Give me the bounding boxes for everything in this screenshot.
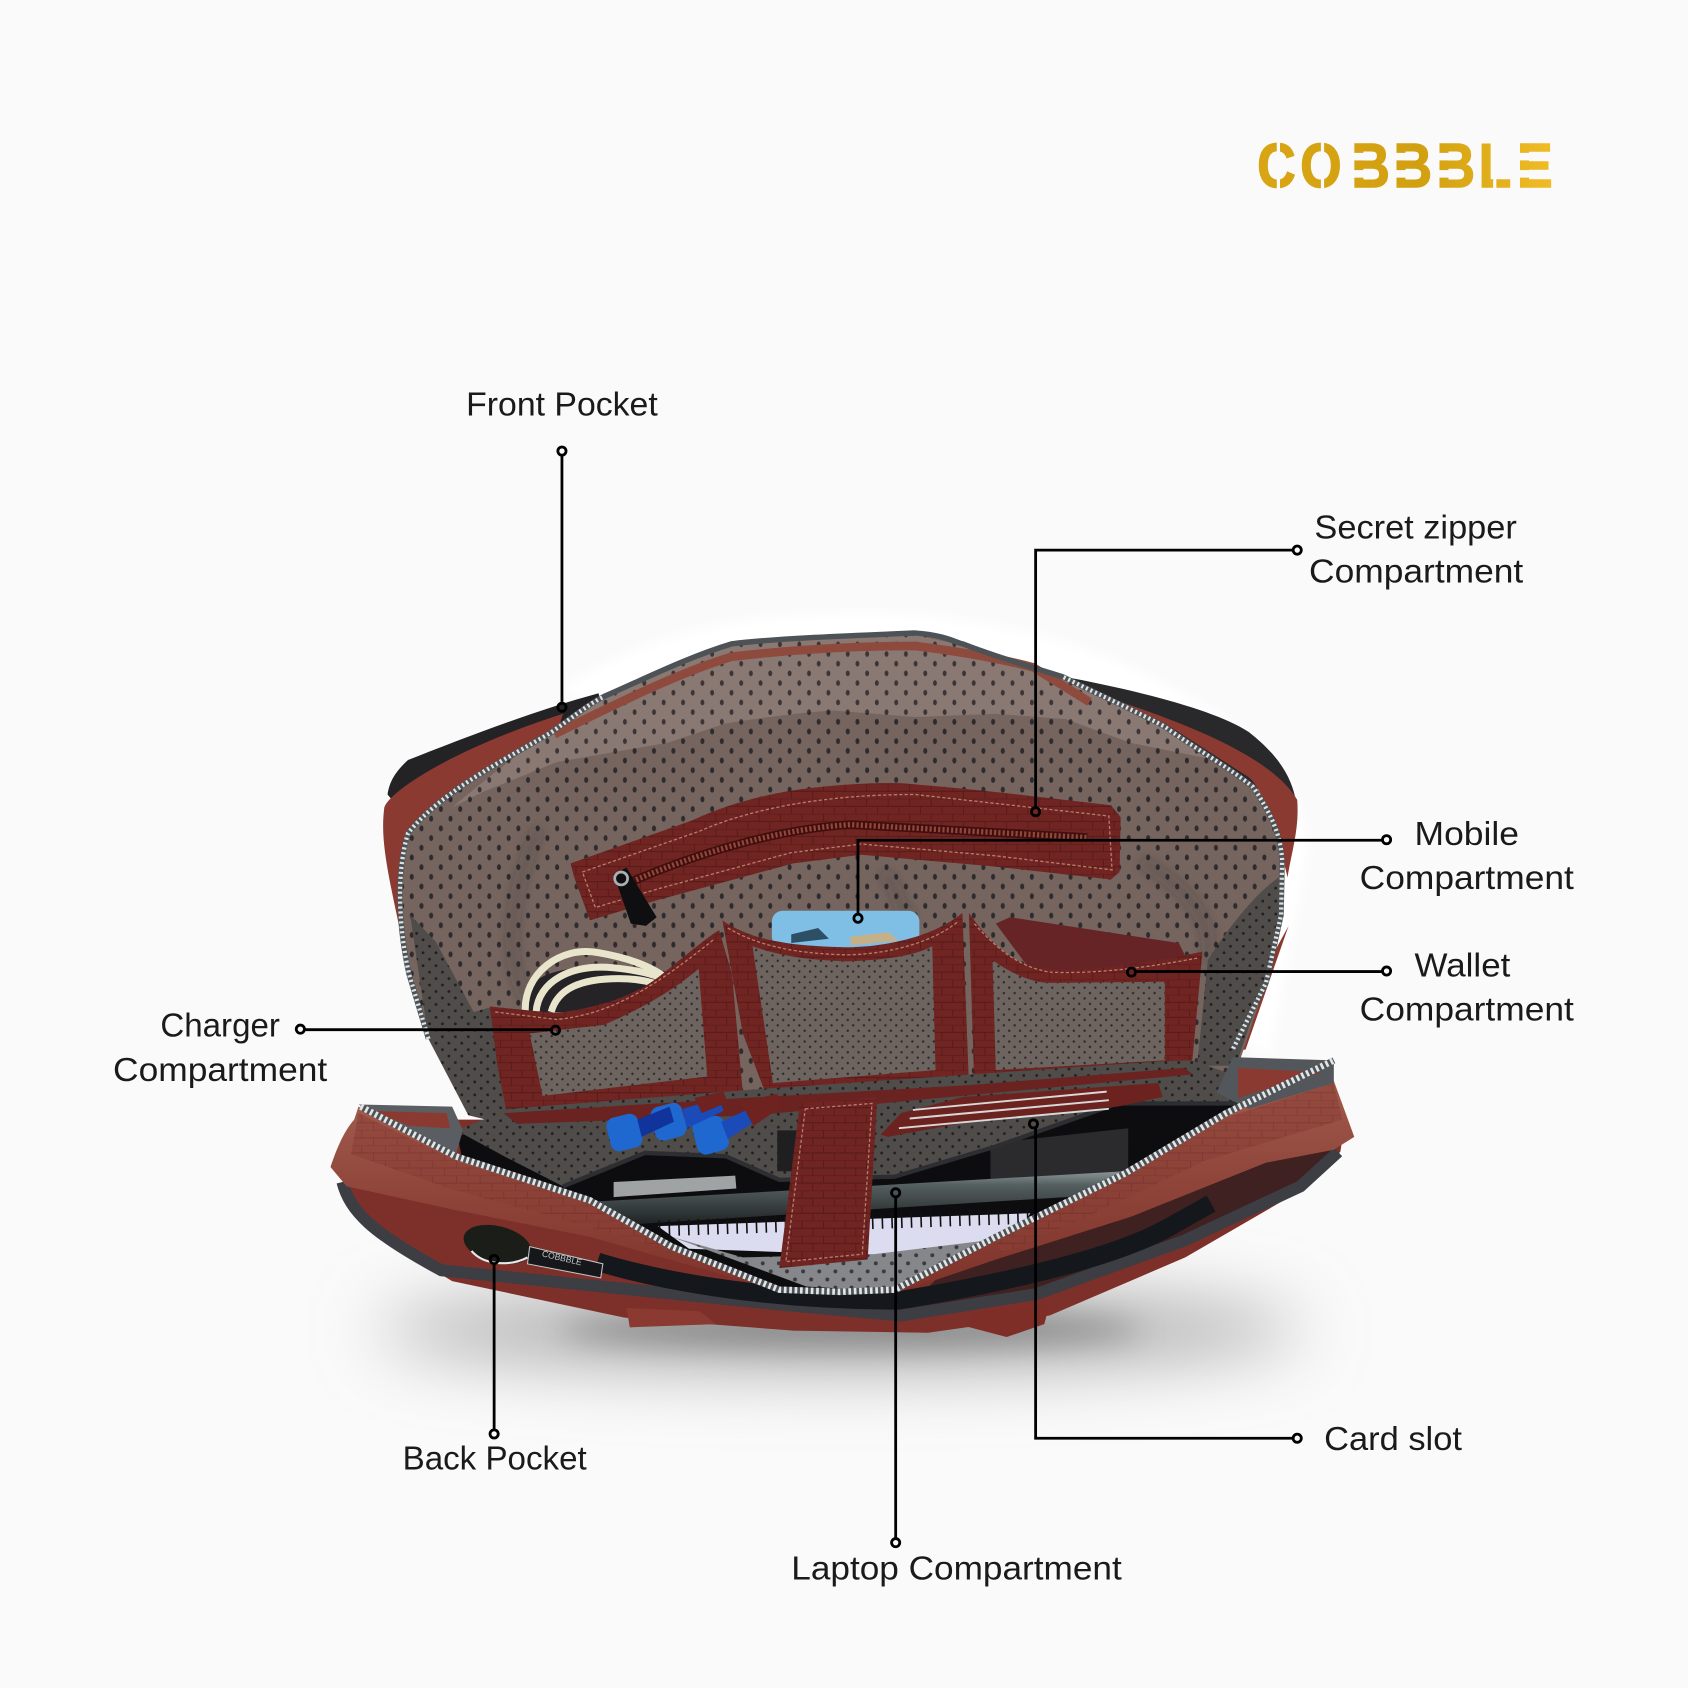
- red leather side, left: [383, 714, 563, 952]
- drop shadow under bag: [377, 1291, 1303, 1368]
- pocket zipper track: [624, 825, 1087, 885]
- mobile pocket: [722, 913, 969, 1096]
- blue phone: [772, 911, 919, 947]
- bag: open back panel: [383, 633, 1298, 1125]
- callout: Front Pocket: [466, 387, 658, 711]
- dark side lining, left: [410, 915, 508, 1125]
- dark side lining, right: [1197, 877, 1279, 1066]
- logo: COBBLE wordmark: COBBBLE: [1257, 132, 1553, 201]
- white halo around bag top: [560, 613, 1308, 1055]
- callout: Card slot: [1029, 1120, 1463, 1458]
- callout: Laptop Compartment: [791, 1189, 1123, 1587]
- callout: Secret zipper Compartment: Compartment: [1309, 553, 1524, 590]
- callout: Back Pocket: Back Pocket: [403, 1440, 587, 1477]
- callout: Mobile Compartment: [854, 816, 1575, 922]
- callout: Front Pocket: Front Pocket: [466, 387, 658, 424]
- red wallet: [996, 917, 1185, 980]
- callout: Charger Compartment: Charger: [160, 1008, 280, 1045]
- card slots: [881, 1083, 1163, 1137]
- left leather wing: [330, 1107, 777, 1291]
- rear tabs: [627, 1308, 716, 1327]
- main zipper, upper: [400, 633, 1282, 1050]
- secret zipper pocket: [571, 783, 1121, 926]
- upper grey lining panel: [456, 1060, 1246, 1186]
- right leather wing: [895, 1081, 1354, 1292]
- callout: Laptop Compartment: Laptop Compartment: [791, 1550, 1123, 1587]
- laptop: [597, 1171, 1125, 1225]
- blue pens: [605, 1092, 782, 1157]
- callout: Card slot: Card slot: [1324, 1421, 1463, 1458]
- back pocket zip tag: [528, 1247, 603, 1278]
- dark outer rim: [342, 1152, 1338, 1316]
- zipper band ends: [358, 1105, 463, 1156]
- black back edge, right: [1060, 676, 1296, 802]
- lining fold shadows: [512, 829, 1208, 1001]
- wallet pocket: [969, 913, 1202, 1085]
- callout: Wallet Compartment: Wallet: [1415, 947, 1511, 984]
- back pocket zip puller: [460, 1218, 535, 1271]
- bag: lower section: [330, 1057, 1354, 1337]
- dark right back panel: [904, 1150, 1334, 1311]
- callout: Mobile Compartment: Mobile: [1415, 816, 1519, 853]
- coiled charger cable: [523, 952, 669, 1012]
- callout: Secret zipper Compartment: [1032, 509, 1524, 816]
- callout: Wallet Compartment: [1127, 947, 1575, 1029]
- back pocket zip tag: COBBBLE: [541, 1249, 583, 1267]
- callout: Secret zipper Compartment: Secret zipper: [1314, 509, 1517, 546]
- silver item: [614, 1176, 736, 1197]
- callout: Charger Compartment: [113, 1008, 560, 1089]
- interior lining: [400, 633, 1282, 1120]
- interior black cavity: [458, 1077, 1246, 1292]
- front lower lining: [672, 1237, 989, 1292]
- callout: Mobile Compartment: Compartment: [1360, 860, 1575, 897]
- callout: Back Pocket: [403, 1255, 587, 1477]
- red piping under top zipper: [554, 646, 1089, 734]
- black back edge, left: [388, 693, 603, 820]
- notebook: [658, 1213, 1036, 1255]
- callout: Charger Compartment: Compartment: [113, 1052, 328, 1089]
- red body silhouette: [344, 1120, 1346, 1333]
- upper lighter lining band: [452, 635, 1211, 807]
- red strap: [779, 1097, 877, 1268]
- zipper pull: [614, 868, 657, 926]
- main zipper, lower: [361, 1060, 1334, 1292]
- callout: Wallet Compartment: Compartment: [1360, 992, 1575, 1029]
- charger pocket: [490, 930, 743, 1120]
- zipper tape: [597, 1204, 1211, 1300]
- pocket bottoms: [504, 1068, 1193, 1124]
- laptop lid back: [990, 1128, 1128, 1184]
- red leather side, right: [1105, 697, 1298, 877]
